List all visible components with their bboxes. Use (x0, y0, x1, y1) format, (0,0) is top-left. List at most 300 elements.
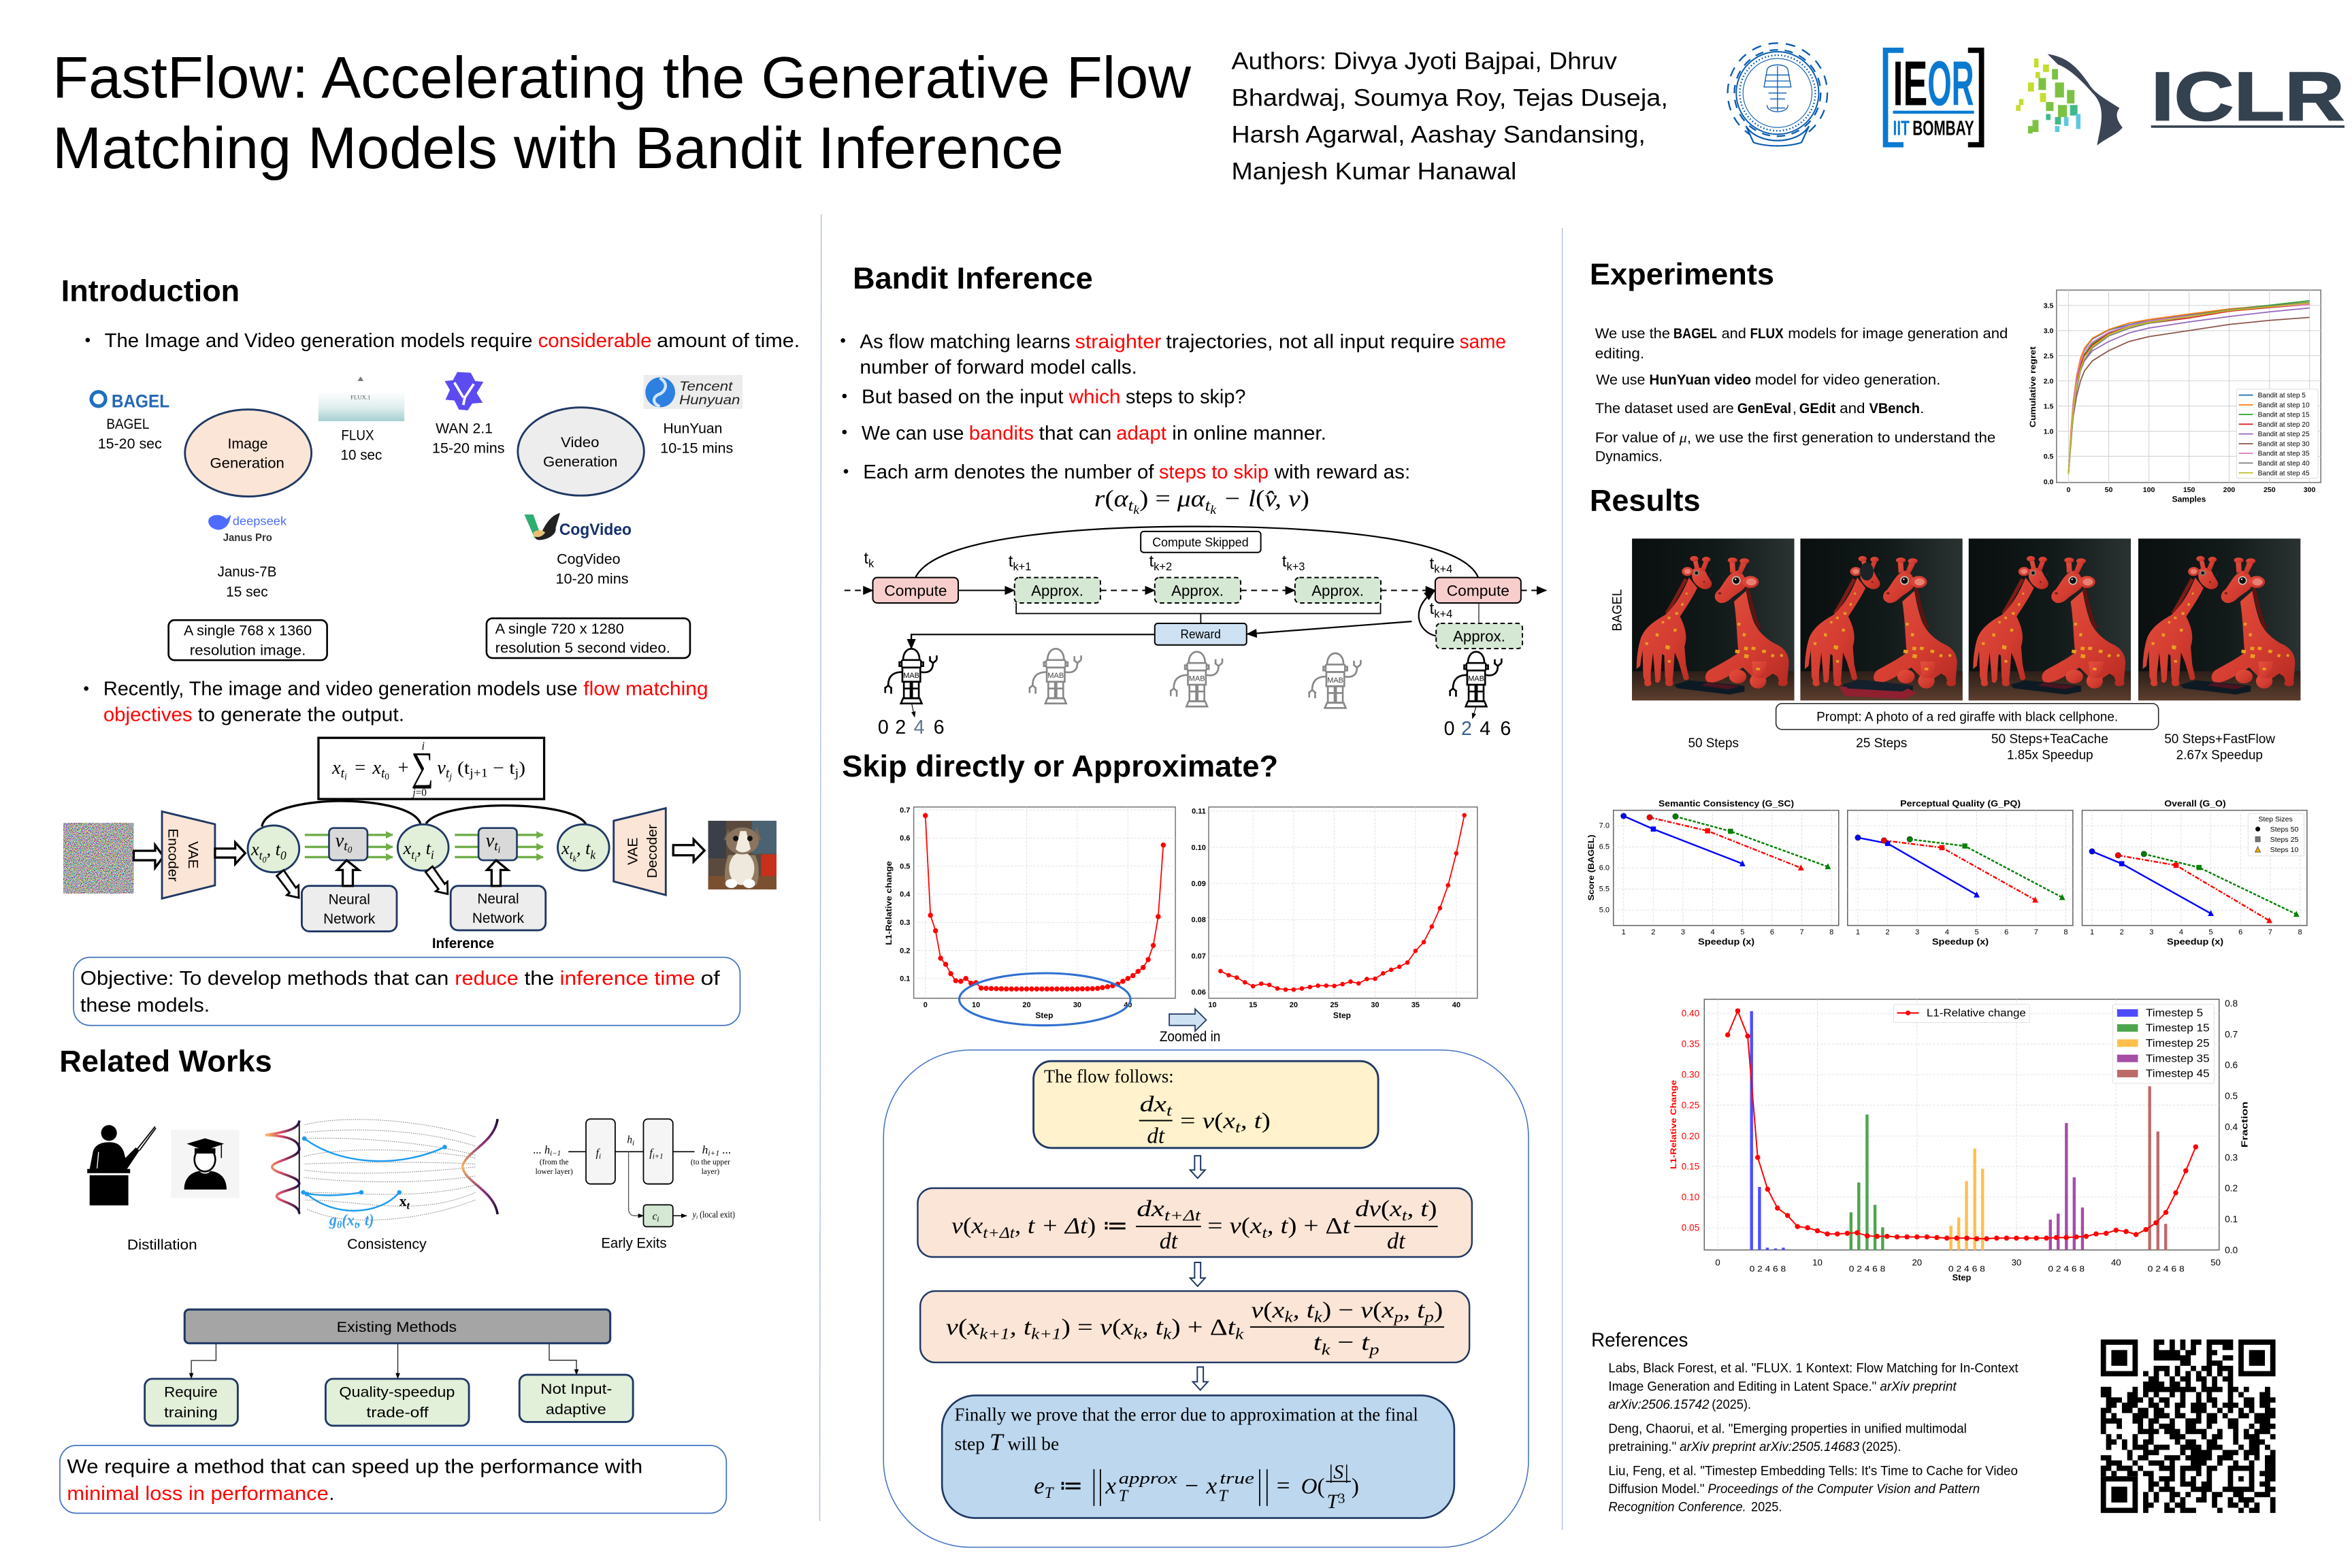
chart group: score vs speedup (1586, 798, 2307, 947)
box: error bound: approx (1119, 1469, 1177, 1488)
node: reward: Reward (1181, 627, 1221, 641)
node: neural network 1 (301, 886, 397, 932)
box: not input-adaptive: adaptive (546, 1402, 606, 1418)
box: velocity taylor: t+Δt (1164, 1207, 1201, 1225)
box: error bound: − (1185, 1472, 1198, 1499)
arrows: reward flow (911, 591, 1479, 649)
heading: related works: Related Works (59, 1045, 272, 1078)
logo: IEOR IIT Bombay: OR (1927, 48, 1974, 118)
node: approx alternative: Approx. (1453, 628, 1505, 645)
logo: IEOR IIT Bombay: IE (1893, 48, 1927, 118)
chart: semantic consistency: 5.5 (1599, 885, 1610, 894)
logo: ICLR wordmark: ICLR (2151, 58, 2345, 135)
box: finite difference: k (1314, 1308, 1323, 1326)
diagram: consistency models: (x (342, 1211, 355, 1229)
node: state tk: t (570, 848, 574, 862)
formula: sum of velocities: t (381, 766, 385, 781)
heading: bandit inference: Bandit Inference (853, 262, 1093, 295)
robot: MAB idle 2 (1170, 652, 1222, 706)
chart: overall: 4 (2179, 928, 2183, 936)
text: value of mu: Dynamics. (1595, 448, 1663, 465)
box: finite difference: k (1133, 1325, 1142, 1343)
legend: bandit steps: Bandit at step 45 (2258, 470, 2310, 477)
diagram: consistency models (265, 1119, 497, 1231)
node: state ti: i (431, 848, 434, 862)
bullet: arms and reward: Each arm denotes the number of (863, 461, 1154, 483)
node: velocity v ti (478, 828, 517, 860)
robot: MAB active end: MAB (1468, 675, 1484, 683)
labels: timesteps: t (864, 549, 868, 568)
chart: zoomed L1 relative change: 15 (1249, 1001, 1257, 1009)
arrow: down 1 (1190, 1156, 1205, 1178)
labels: timesteps: k+4 (1434, 563, 1452, 576)
callout: single image: resolution image. (190, 642, 306, 659)
node: state ti: x (404, 838, 411, 858)
box: error bound: = (1277, 1472, 1290, 1499)
diagram: early exits: (from the (540, 1158, 569, 1166)
box: finite difference: v(x (946, 1315, 978, 1340)
box: flow ode: t (1166, 1102, 1173, 1120)
node: neural network 2: Neural (477, 891, 519, 907)
label: FLUX time: 10 sec (341, 447, 382, 463)
node: velocity v ti: v (486, 830, 494, 851)
arms: choice 4: 4 (914, 717, 925, 738)
bullet: flow matching (84, 678, 708, 726)
label: WAN time: 15-20 mins (432, 441, 505, 457)
chart: L1 relative change: 10 (972, 1001, 980, 1009)
label: early exits: Early Exits (601, 1235, 667, 1251)
QR code (2101, 1339, 2276, 1513)
arrows: timeline (845, 590, 1546, 591)
chart: cumulative regret: 1.0 (2044, 427, 2054, 436)
label: BAGEL time: BAGEL (106, 416, 149, 432)
bars: timestep 15 (1850, 1115, 1884, 1250)
box: velocity taylor: dv (x (1355, 1196, 1400, 1222)
chart: L1 relative change: Step (1035, 1011, 1053, 1020)
box: finite difference: , t (1142, 1315, 1164, 1340)
labels: timesteps: t (1430, 555, 1434, 573)
axis labels: L1: 0.35 (1682, 1039, 1700, 1049)
bullet: which steps: But based on the input (862, 387, 1064, 408)
formula: reward: − l (1216, 485, 1256, 512)
bullet: flow matching: to generate the output. (198, 704, 404, 726)
diagram: early exits: lower layer) (536, 1168, 573, 1176)
box: finite difference: p (1423, 1308, 1434, 1326)
arrow: decoder to output (673, 839, 704, 862)
legend: bandit steps: Bandit at step 10 (2258, 402, 2310, 409)
axis labels: step: 50 (2210, 1257, 2221, 1267)
VAE decoder (614, 808, 666, 895)
arms: choice 4: 0 (878, 717, 889, 738)
text: reference list: Diffusion Model." (1608, 1482, 1704, 1497)
logo: IIT Bombay emblem (1731, 46, 1824, 146)
formula: sum of velocities: j+1 (469, 766, 488, 779)
diagram: early exits: layer) (702, 1168, 719, 1176)
chart: semantic consistency: 5.0 (1599, 906, 1610, 915)
box: error bound (942, 1395, 1454, 1518)
legend: timesteps: Timestep 35 (2146, 1053, 2210, 1064)
label: HunYuan time: HunYuan (664, 421, 722, 437)
image: noise input (63, 823, 133, 894)
axis labels: fraction: 0.2 (2225, 1183, 2238, 1194)
box: finite difference: k (1284, 1308, 1293, 1326)
formula: reward: k (1210, 503, 1218, 517)
callout: single video: resolution 5 second video. (495, 640, 670, 656)
box: velocity taylor: ) ≔ (1088, 1213, 1128, 1239)
chart: zoomed L1 relative change: 20 (1290, 1001, 1298, 1009)
axis labels: fraction: 0.8 (2225, 998, 2238, 1009)
formula: sum of velocities: j (448, 772, 452, 782)
text: models used: models for image generation and (1788, 325, 2008, 342)
heading: references: References (1591, 1329, 1688, 1351)
caption: TeaCache: 50 Steps+TeaCache (1991, 732, 2108, 747)
icon: CogVideo logo (524, 513, 632, 540)
axis labels: L1: 0.25 (1682, 1100, 1700, 1111)
legend: bandit steps: Bandit at step 15 (2258, 412, 2310, 419)
box: not input-adaptive: Not Input- (540, 1382, 612, 1397)
chart: perceptual quality: 4 (1945, 928, 1949, 936)
label: CogVideo time: 10-20 mins (555, 571, 629, 587)
box: finite difference: ) + Δ (1171, 1315, 1228, 1340)
node: state t0: 0 (263, 855, 267, 864)
diagram: early exits: (local exit) (698, 1209, 735, 1220)
box: error bound: |S| (1328, 1461, 1349, 1484)
legend: bandit steps: Bandit at step 35 (2258, 451, 2310, 458)
label: CogVideo time: CogVideo (557, 552, 621, 568)
box: velocity taylor: dx (1137, 1196, 1159, 1222)
arrow: state to network 2 (425, 866, 448, 894)
image: FastFlow giraffes (2138, 538, 2300, 700)
legend: step sizes: Steps 10 (2270, 846, 2298, 854)
arrow: down 3 (1193, 1367, 1208, 1390)
box: error bound: T (1045, 1484, 1055, 1502)
logo: IEOR IIT Bombay: BOMBAY (1912, 116, 1974, 140)
labels: timesteps: k (868, 557, 875, 570)
box: finite difference: v(x (1251, 1298, 1283, 1323)
robot: MAB idle 1 (1029, 649, 1081, 704)
chart: L1 change with arm fractions: Fraction (2239, 1102, 2249, 1147)
box: finite difference: k (1235, 1325, 1244, 1343)
box: error bound: x (1206, 1472, 1218, 1499)
callout: objective: reduce (455, 968, 519, 990)
chart: zoomed L1 relative change: 25 (1330, 1001, 1339, 1009)
legend: bandit steps: Bandit at step 40 (2258, 460, 2310, 468)
node: velocity v ti: t (494, 839, 498, 854)
bullet: straighter trajectories: straighter (1075, 331, 1162, 353)
diagram: early exits: h (627, 1134, 632, 1146)
callout: objective (74, 958, 740, 1026)
highlight: ellipse over plateau (960, 973, 1130, 1026)
image: TeaCache giraffes (1969, 538, 2131, 700)
chart: perceptual quality (1848, 798, 2073, 947)
VAE encoder: Encoder (165, 828, 181, 881)
chart: zoomed L1 relative change: 35 (1411, 1001, 1420, 1009)
title: FastFlow: Accelerating the Generative Flow (52, 45, 1192, 110)
text: value of mu: For value of μ, we use the first generation to understand the (1595, 429, 1995, 446)
VAE decoder: Decoder (644, 824, 660, 878)
chart: semantic consistency: 4 (1711, 928, 1715, 936)
title (52, 45, 1192, 181)
chart: L1 relative change: 0.7 (900, 806, 910, 815)
axis labels: L1 (1682, 1009, 1700, 1233)
box: finite difference: , t (1010, 1315, 1032, 1340)
formula: reward: r(α (1094, 485, 1126, 512)
formula: sum of velocities: ) (519, 758, 525, 778)
icon: deepseek logo: Janus Pro (223, 532, 272, 544)
box: finite difference: p (1368, 1341, 1379, 1358)
box: require training (145, 1379, 238, 1426)
chart: overall: 6 (2238, 928, 2242, 936)
node: state t0: 0 (280, 849, 287, 862)
node: velocity v t0 (329, 828, 368, 860)
labels: timesteps: k+1 (1013, 561, 1031, 573)
bullet: straighter trajectories: As flow matching learns (860, 331, 1071, 353)
callout: objective: of (700, 968, 720, 990)
callout: objective: inference time (560, 968, 695, 990)
callout: single image (169, 620, 327, 660)
box: error bound: 3 (1338, 1490, 1345, 1506)
text: value of mu (1595, 429, 1995, 465)
formula: sum of velocities: (t (457, 758, 468, 778)
callout: method requirement (60, 1446, 726, 1513)
bullet: flow matching: objectives (103, 704, 193, 726)
node: state t0: x (251, 839, 259, 859)
diagram: early exits: i−1 (550, 1149, 561, 1158)
axis labels: L1: 0.20 (1682, 1131, 1700, 1141)
box: quality-speedup trade-off: trade-off (366, 1405, 429, 1421)
box: finite difference: ) − (1322, 1298, 1360, 1323)
legend: bandit steps (2236, 389, 2318, 478)
formula: sum of velocities (318, 738, 544, 799)
box: finite difference: t (1228, 1315, 1234, 1340)
caption: FastFlow: 50 Steps+FastFlow (2164, 732, 2276, 747)
node: approx 2 (1155, 578, 1241, 603)
chart: L1 relative change: 40 (1124, 1001, 1132, 1009)
chart: L1 change with arm fractions (1669, 998, 2249, 1283)
diagram: flow matching inference (63, 801, 777, 951)
VAE decoder: VAE (625, 838, 641, 865)
diagram: early exits: c (653, 1211, 657, 1222)
text: models used (1595, 325, 2008, 361)
arrow: down 2 (1190, 1262, 1205, 1286)
chart: L1 relative change: 0.3 (900, 919, 910, 927)
arrow: state to network 1 (277, 870, 299, 898)
formula: sum of velocities: ∑ (411, 744, 434, 789)
axis labels: L1: 0.10 (1682, 1192, 1700, 1203)
bullet: which steps (843, 387, 1245, 408)
box: finite difference (920, 1291, 1469, 1362)
node: neural network 2: Network (472, 911, 525, 926)
box: error bound: ) (1352, 1474, 1359, 1499)
chart: cumulative regret: 300 (2304, 486, 2316, 494)
chart: zoomed L1 relative change: 0.08 (1192, 916, 1206, 924)
diagram: early exits: i (599, 1153, 601, 1161)
node: velocity v t0: 0 (348, 845, 353, 855)
box: require training: Require (164, 1385, 218, 1401)
legend: step sizes (2248, 814, 2304, 856)
title: Matching Models with Bandit Inference (52, 116, 1064, 181)
labels: timesteps: k+3 (1286, 561, 1305, 573)
bullet: bandits adapt: bandits (969, 423, 1034, 444)
text: models used: editing. (1595, 344, 1644, 361)
authors: Harsh Agarwal, Aashay Sandansing, (1232, 121, 1646, 148)
chart: semantic consistency: 7.0 (1599, 822, 1610, 830)
node: state tk (557, 824, 609, 870)
labels: timesteps: t (1430, 600, 1434, 618)
chart: L1 change with arm fractions: Step (1953, 1273, 1972, 1283)
box: require training: training (164, 1405, 218, 1421)
labels: timesteps: t (1282, 553, 1286, 571)
chart: perceptual quality: 6 (2004, 928, 2008, 936)
chart: cumulative regret: Samples (2172, 494, 2206, 504)
axis labels: fraction (2225, 998, 2238, 1255)
chart: perceptual quality: 5 (1974, 928, 1979, 936)
labels: timesteps: t (1149, 553, 1154, 571)
icon: Tencent Hunyuan logo: Tencent (679, 379, 734, 394)
box: flow ode: , t (1241, 1109, 1262, 1133)
axis labels: step: 0 2 4 6 8 (2048, 1264, 2085, 1273)
diagram: early exits: (to the upper (691, 1158, 730, 1166)
node: video generation (518, 408, 644, 495)
bullet: generation time: considerable (538, 330, 652, 352)
box: error bound: x (1105, 1472, 1116, 1499)
labels: timesteps: t (1009, 553, 1013, 571)
callout: method requirement: . (329, 1483, 334, 1505)
bullet: generation time: amount of time. (657, 330, 800, 352)
bars: timestep 5 (1750, 1011, 1785, 1250)
chart: cumulative regret: 3.5 (2044, 302, 2054, 310)
formula: reward: (v̂, v ) (1256, 485, 1308, 512)
box: error bound: ≔ (1053, 1472, 1083, 1499)
label: Janus time: Janus-7B (218, 564, 276, 580)
caption: 50 steps: 50 Steps (1688, 736, 1739, 751)
text: models used: FLUX (1750, 325, 1784, 342)
chart: cumulative regret: 50 (2105, 486, 2112, 494)
formula: sum of velocities: v (437, 757, 446, 779)
node: approx 3: Approx. (1311, 582, 1364, 599)
chart: overall: 3 (2149, 928, 2153, 936)
box: error bound: Finally we prove that the error due to approximation at the final (955, 1404, 1418, 1425)
box: error bound: true (1220, 1469, 1254, 1488)
authors: Bhardwaj, Soumya Roy, Tejas Duseja, (1232, 84, 1668, 111)
text: reference list: arXiv preprint (1880, 1379, 1957, 1394)
formula: sum of velocities: i (422, 740, 425, 753)
diagram: early exits: i (657, 1215, 659, 1224)
label: Janus time (218, 564, 276, 600)
legend: timesteps: Timestep 15 (2146, 1023, 2210, 1034)
box: existing methods: Existing Methods (337, 1320, 457, 1335)
chart: overall: 1 (2090, 928, 2094, 936)
icon: WAN logo (444, 372, 483, 410)
robot: MAB active end (1450, 652, 1501, 706)
formula: sum of velocities: 0 (385, 772, 389, 782)
icon: deepseek logo: deepseek (233, 514, 287, 527)
chart: semantic consistency: 7 (1799, 928, 1804, 936)
callout: single video: A single 720 x 1280 (495, 621, 624, 637)
text: reference list: Recognition Conference. (1608, 1501, 1746, 1515)
label: distillation: Distillation (127, 1237, 197, 1253)
node: approx 2: Approx. (1171, 582, 1224, 599)
chart: perceptual quality: Speedup (x) (1932, 936, 1989, 947)
formula: reward: t (1128, 496, 1134, 515)
chart: zoomed L1 relative change: 40 (1452, 1001, 1460, 1009)
text: models used: BAGEL (1673, 325, 1717, 342)
chart: perceptual quality: 2 (1886, 928, 1890, 936)
box: existing methods (184, 1309, 610, 1343)
chart: cumulative regret: 200 (2223, 486, 2235, 494)
label: WAN time: WAN 2.1 (436, 421, 493, 437)
callout: method requirement: minimal loss in performance (67, 1483, 329, 1505)
diagram: early exits: i (632, 1139, 634, 1147)
axis labels: fraction: 0.6 (2225, 1060, 2238, 1071)
chart: zoomed L1 relative change: Step (1333, 1011, 1351, 1020)
box: finite difference: t (1313, 1330, 1320, 1356)
robot: MAB idle 3: MAB (1327, 676, 1343, 685)
axis labels: fraction: 0.3 (2225, 1153, 2238, 1163)
arc: compute skipped (915, 527, 1478, 578)
legend: L1 relative change (1893, 1004, 2029, 1023)
bullet: bandits adapt (843, 423, 1326, 444)
box: finite difference: , t (1403, 1298, 1426, 1323)
arms: choice 4: 2 (895, 717, 906, 738)
callout: objective: the (524, 968, 554, 990)
bullet: straighter trajectories: same (1460, 331, 1506, 353)
panel: derivation (883, 1050, 1529, 1548)
diagram: consistency models: g (329, 1211, 338, 1229)
legend: step sizes: Steps 50 (2270, 826, 2298, 834)
node: compute start: Compute (884, 582, 947, 599)
node: video generation: Video (561, 435, 600, 451)
bullet: straighter trajectories: number of forward model calls. (860, 357, 1137, 378)
arcs: integration steps (262, 801, 586, 826)
formula: sum of velocities: + (398, 757, 409, 779)
legend: timesteps: Timestep 45 (2146, 1068, 2210, 1080)
diagram: consistency models: θ (337, 1220, 342, 1231)
labels: timesteps: k+2 (1154, 561, 1172, 573)
box: flow ode: dt (1147, 1124, 1165, 1149)
axis labels: fraction: 0.0 (2225, 1245, 2238, 1255)
axis labels: L1: 0.30 (1682, 1070, 1700, 1080)
arrow: noise to encoder (133, 845, 163, 868)
label: compute skipped (1141, 532, 1261, 553)
node: approx 3 (1295, 578, 1381, 603)
icon: CogVideo logo: CogVideo (559, 521, 632, 539)
node: reward (1155, 623, 1247, 645)
chart: L1 relative change: 20 (1022, 1001, 1031, 1009)
arrow: network 1 to velocity (337, 860, 359, 886)
text: video model: model for video generation. (1755, 371, 1940, 388)
arms: choice 2: 2 (1461, 718, 1472, 740)
chart: semantic consistency: Speedup (x) (1698, 936, 1754, 947)
arms: choice 2: 0 (1444, 718, 1454, 740)
axis labels: step: 0 2 4 6 8 (1849, 1264, 1886, 1273)
icon: Tencent Hunyuan logo (643, 375, 742, 409)
box: finite difference: p (1392, 1308, 1403, 1326)
chart: semantic consistency: 3 (1681, 928, 1685, 936)
text: datasets (1595, 399, 1924, 416)
label: inference: Inference (432, 936, 494, 951)
node: state tk: k (590, 848, 596, 862)
label: WAN time (432, 421, 505, 457)
chart: cumulative regret: 0 (2066, 486, 2070, 494)
VAE encoder (162, 811, 215, 898)
formula: reward: μα (1177, 485, 1202, 512)
icon: deepseek logo (208, 514, 287, 544)
chart: L1 relative change (884, 806, 1175, 1020)
axis labels: step: 10 (1812, 1257, 1823, 1267)
bullet: which steps: which (1068, 387, 1121, 408)
diagram: early exits: ... h (534, 1143, 550, 1156)
